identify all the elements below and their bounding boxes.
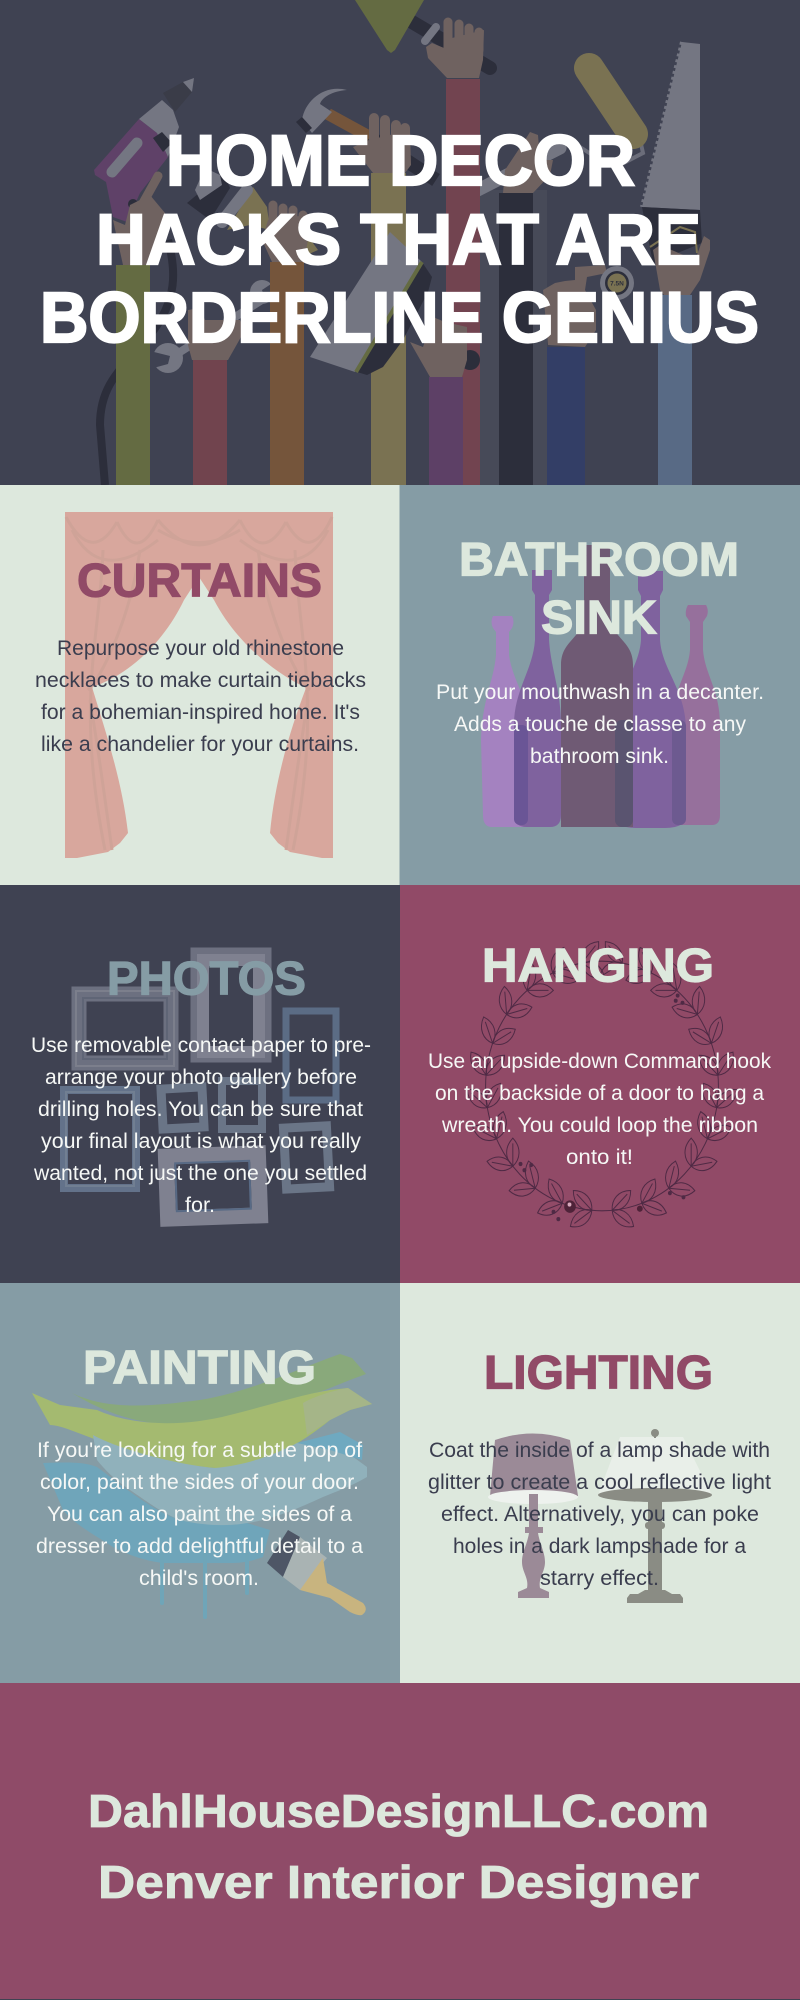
icon: leaf wreath (463, 937, 741, 1232)
icon: paint strokes and brush (32, 1354, 372, 1617)
footer text: DahlHouseDesignLLC.com (88, 1785, 709, 1837)
icon: squeegee (310, 232, 480, 375)
text: bathroom tip: bathroom sink. (530, 744, 669, 768)
heading: bathroom sink (459, 532, 739, 644)
text: photos tip: Use removable contact paper to pre- (31, 1033, 371, 1057)
text: painting tip: color, paint the sides of your door. (40, 1470, 359, 1494)
text: painting tip (36, 1438, 363, 1590)
icon: trowel (355, 0, 490, 68)
text: lighting tip: Coat the inside of a lamp shade with (429, 1438, 770, 1462)
icon: right table lamp (598, 1429, 712, 1603)
panel: hero header (0, 0, 800, 485)
icon: scraper tool (187, 168, 318, 258)
text: photos tip: for. (185, 1193, 215, 1217)
panel: lighting (400, 1283, 800, 1683)
text: lighting tip: effect. Alternatively, you can poke (441, 1502, 759, 1526)
icon: decanter bottles (481, 545, 720, 828)
text: hanging tip: wreath. You could loop the ribbon (441, 1113, 758, 1137)
text: lighting tip (428, 1438, 771, 1590)
heading: photos: PHOTOS (107, 952, 306, 1004)
hands (113, 22, 710, 377)
footer text (88, 1785, 709, 1908)
title: BORDERLINE GENIUS (40, 279, 759, 358)
icon: photo frames gallery (64, 951, 336, 1219)
icon: measuring tape (600, 266, 634, 300)
text: curtains tip (35, 636, 366, 756)
text: photos tip: arrange your photo gallery before (45, 1065, 357, 1089)
icon: left table lamp (488, 1434, 578, 1598)
text: lighting tip: glitter to create a cool reflective light (428, 1470, 771, 1494)
arm: olive (116, 265, 150, 485)
arm: tall red (446, 79, 480, 485)
icon: stage curtains (65, 512, 333, 858)
heading: hanging: HANGING (482, 938, 714, 992)
text: painting tip: You can also paint the sides of a (47, 1502, 352, 1526)
heading: curtains: CURTAINS (77, 554, 322, 606)
text: curtains tip: necklaces to make curtain tiebacks (35, 668, 366, 692)
arm: tan (371, 173, 406, 485)
text: bathroom tip: Adds a touche de classe to any (454, 712, 746, 736)
text: lighting tip: holes in a dark lampshade for a (453, 1534, 746, 1558)
heading: lighting: LIGHTING (484, 1346, 713, 1398)
text: hanging tip: onto it! (566, 1145, 633, 1169)
illustration: raised arms holding tools (94, 0, 710, 485)
text: photos tip: drilling holes. You can be sure that (38, 1097, 363, 1121)
heading: bathroom sink: SINK (541, 590, 657, 644)
heading: bathroom sink: BATHROOM (459, 532, 739, 586)
text: curtains tip: Repurpose your old rhinestone (57, 636, 344, 660)
text: hanging tip (428, 1049, 771, 1169)
text: bathroom tip (436, 680, 764, 768)
text: bathroom tip: Put your mouthwash in a decanter. (436, 680, 764, 704)
panel: painting (0, 1283, 400, 1683)
panel: hanging (400, 885, 800, 1283)
arm: maroon (193, 360, 227, 485)
arm: brown (270, 262, 304, 485)
text: hanging tip: on the backside of a door to hang a (435, 1081, 764, 1105)
panel: footer (0, 1683, 800, 2000)
icon: wrench (146, 278, 282, 373)
text: photos tip: your final layout is what you really (41, 1129, 361, 1153)
panel: curtains (0, 485, 400, 885)
icon: claw hammer (296, 89, 436, 180)
icon: power drill (94, 78, 194, 222)
text: lighting tip: starry effect. (540, 1566, 659, 1590)
panel: bathroom sink (400, 485, 800, 885)
arm: blue (658, 295, 692, 485)
text: photos tip: wanted, not just the one you settled (33, 1161, 367, 1185)
icon: paint brush (267, 1530, 366, 1615)
arm: navy (547, 347, 585, 485)
text: painting tip: child's room. (139, 1566, 259, 1590)
icon: measuring tape: 7.5N (610, 280, 624, 288)
text: photos tip (31, 1033, 371, 1217)
text: curtains tip: like a chandelier for your curtains. (41, 732, 359, 756)
text: hanging tip: Use an upside-down Command hook (428, 1049, 771, 1073)
arm: purple (429, 377, 463, 485)
title: HOME DECOR (166, 122, 635, 201)
heading: painting: PAINTING (83, 1340, 316, 1394)
icon: hand saw (642, 42, 702, 263)
title (40, 122, 759, 358)
arm: dark (499, 193, 533, 485)
footer text: Denver Interior Designer (98, 1856, 699, 1908)
text: painting tip: If you're looking for a subtle pop of (37, 1438, 362, 1462)
text: painting tip: dresser to add delightful detail to a (36, 1534, 363, 1558)
icon: paint roller (472, 68, 643, 193)
panel: photos (0, 885, 400, 1283)
title: HACKS THAT ARE (96, 201, 701, 280)
text: curtains tip: for a bohemian-inspired home. It's (41, 700, 360, 724)
